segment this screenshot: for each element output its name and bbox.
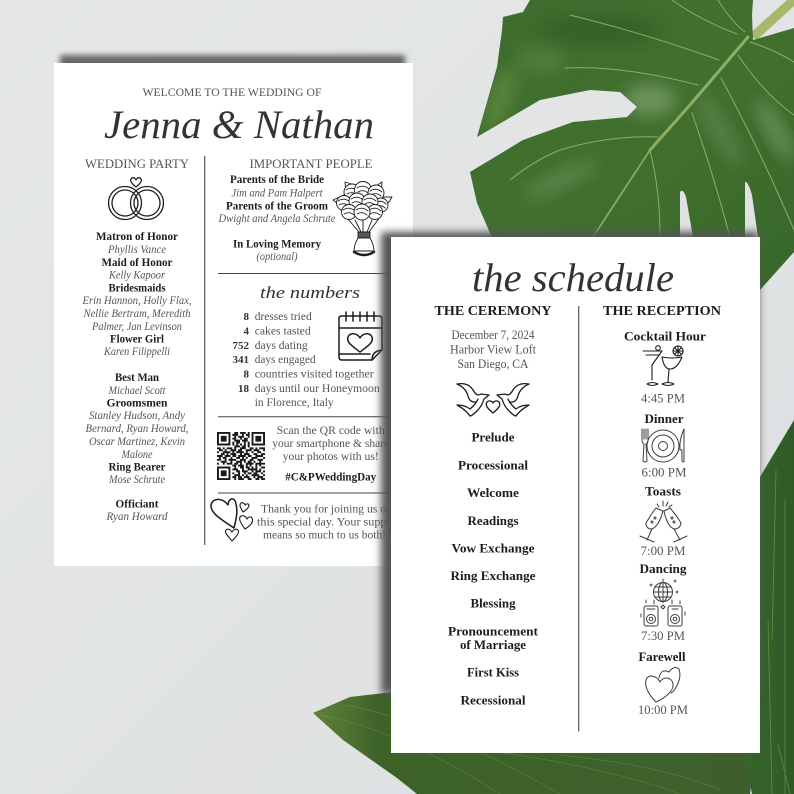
monstera leaf, top right bbox=[470, 0, 794, 290]
text block: date and venue: San Diego, CA bbox=[458, 356, 529, 371]
text block: wedding party names: Kelly Kapoor bbox=[108, 268, 165, 282]
text block: important people names: Jim and Pam Halpert bbox=[232, 186, 323, 200]
list: ceremony order: Pronouncement bbox=[448, 623, 539, 638]
text block: thank you: means so much to us both! bbox=[263, 528, 386, 542]
reception item: cocktail hour: 4:45 PM bbox=[641, 391, 685, 406]
text block: important people names: Parents of the Groom bbox=[226, 198, 328, 212]
text block: wedding party names: Matron of Honor bbox=[96, 229, 179, 243]
text block: number statistics bbox=[232, 309, 380, 409]
reception item: toasts bbox=[640, 484, 687, 558]
icon: wedding rings with heart bbox=[108, 178, 164, 220]
column divider bbox=[578, 306, 580, 732]
divider bbox=[218, 416, 400, 418]
text block: number statistics: cakes tasted bbox=[255, 324, 311, 338]
text block: QR instructions: your smartphone & share bbox=[272, 436, 389, 450]
card shadow: schedule card bbox=[381, 232, 759, 694]
reception item: dinner bbox=[642, 411, 687, 480]
text block: number statistics: countries visited together bbox=[255, 366, 374, 380]
text block: wedding party names: Stanley Hudson, Andy bbox=[89, 408, 186, 422]
list: ceremony order: Vow Exchange bbox=[452, 540, 535, 555]
list: ceremony order: Blessing bbox=[470, 596, 516, 611]
title: couple names: Jenna & Nathan bbox=[104, 102, 374, 147]
text block: number statistics: 4 bbox=[244, 326, 250, 338]
text block: wedding party names: Oscar Martinez, Kevin bbox=[89, 434, 185, 448]
text block: number statistics: dresses tried bbox=[255, 309, 312, 323]
text block: wedding party names: Mose Schrute bbox=[108, 472, 166, 486]
icon: plate and cutlery bbox=[642, 429, 684, 462]
text block: wedding party names: Palmer, Jan Levinson bbox=[91, 319, 182, 333]
text block: thank you: this special day. Your support bbox=[257, 515, 401, 529]
text block: wedding party names: Ryan Howard bbox=[106, 509, 168, 523]
reception item: farewell: Farewell bbox=[638, 649, 686, 664]
text block: thank you bbox=[257, 502, 401, 542]
title: the schedule: the schedule bbox=[472, 255, 674, 300]
icon: two hearts bbox=[646, 668, 680, 702]
heading: the reception: THE RECEPTION bbox=[603, 304, 721, 319]
text block: QR instructions: #C&PWeddingDay bbox=[285, 470, 376, 484]
text block: number statistics: 8 bbox=[244, 368, 250, 380]
text block: important people names bbox=[218, 172, 336, 263]
text block: wedding party names: Bernard, Ryan Howard, bbox=[86, 421, 188, 435]
reception item: dinner: Dinner bbox=[644, 411, 684, 426]
card shadow: program card bbox=[60, 55, 405, 115]
panel: welcome program card bbox=[54, 63, 413, 566]
text block: wedding party names: Malone bbox=[121, 447, 153, 461]
reception item: dinner: 6:00 PM bbox=[642, 465, 687, 480]
reception item: toasts: Toasts bbox=[645, 484, 681, 499]
text block: wedding party names: Nellie Bertram, Meredith bbox=[83, 306, 190, 320]
list: ceremony order: Processional bbox=[458, 458, 528, 473]
text block: QR instructions: Scan the QR code with bbox=[277, 423, 385, 437]
list: ceremony order bbox=[448, 430, 539, 707]
text block: number statistics: 752 bbox=[232, 340, 250, 352]
text block: wedding party names: Officiant bbox=[116, 496, 158, 510]
reception item: dancing: Dancing bbox=[640, 561, 687, 576]
icon: cocktails bbox=[643, 346, 683, 386]
text block: important people names: Parents of the Bride bbox=[230, 172, 325, 186]
heading: wedding party: WEDDING PARTY bbox=[85, 156, 190, 171]
icon: disco ball and speakers bbox=[641, 579, 685, 626]
text block: date and venue bbox=[450, 327, 536, 371]
icon: champagne toast bbox=[640, 501, 687, 542]
divider bbox=[218, 272, 400, 274]
icon: hearts bbox=[211, 499, 253, 541]
text block: number statistics: 8 bbox=[244, 311, 250, 323]
text block: QR instructions: your photos with us! bbox=[283, 449, 379, 463]
heading: welcome line: WELCOME TO THE WEDDING OF bbox=[142, 85, 322, 99]
reception item: farewell: 10:00 PM bbox=[638, 702, 688, 717]
text block: wedding party names: Michael Scott bbox=[108, 383, 166, 397]
text block: date and venue: Harbor View Loft bbox=[450, 342, 536, 357]
text block: wedding party names: Bridesmaids bbox=[108, 280, 166, 294]
text block: wedding party names bbox=[82, 229, 192, 523]
divider bbox=[218, 492, 400, 494]
text block: number statistics: 18 bbox=[238, 383, 250, 395]
text block: number statistics: in Florence, Italy bbox=[255, 395, 334, 409]
column divider bbox=[204, 156, 206, 545]
leaf, right edge bbox=[742, 420, 794, 794]
heading: the ceremony: THE CEREMONY bbox=[434, 304, 552, 319]
heading: the numbers: the numbers bbox=[260, 283, 360, 302]
reception item: dancing bbox=[640, 561, 687, 643]
reception item: cocktail hour bbox=[624, 329, 706, 406]
text block: date and venue: December 7, 2024 bbox=[452, 327, 535, 342]
text block: thank you: Thank you for joining us on bbox=[261, 502, 392, 516]
list: ceremony order: First Kiss bbox=[467, 665, 519, 680]
heading: important people: IMPORTANT PEOPLE bbox=[250, 156, 373, 171]
text block: important people names: (optional) bbox=[256, 249, 298, 263]
text block: wedding party names: Karen Filippelli bbox=[103, 344, 170, 358]
reception item: dancing: 7:30 PM bbox=[641, 628, 685, 643]
list: ceremony order: of Marriage bbox=[460, 637, 526, 652]
text block: number statistics: 341 bbox=[232, 354, 249, 366]
text block: wedding party names: Flower Girl bbox=[110, 332, 165, 346]
list: ceremony order: Prelude bbox=[472, 430, 515, 445]
leaf, bottom bbox=[313, 692, 760, 794]
text block: important people names: In Loving Memory bbox=[233, 236, 321, 250]
list: ceremony order: Ring Exchange bbox=[450, 568, 536, 583]
text block: QR instructions bbox=[272, 423, 389, 484]
QR code bbox=[217, 433, 265, 479]
text block: wedding party names: Best Man bbox=[115, 370, 159, 384]
reception item: toasts: 7:00 PM bbox=[640, 543, 686, 558]
text block: number statistics: days engaged bbox=[255, 352, 316, 366]
text block: number statistics: days dating bbox=[255, 338, 308, 352]
text block: wedding party names: Phyllis Vance bbox=[107, 242, 167, 256]
icon: calendar with heart bbox=[339, 312, 382, 360]
text block: number statistics: days until our Honeymoon bbox=[255, 381, 380, 395]
list: ceremony order: Readings bbox=[468, 513, 518, 528]
list: ceremony order: Welcome bbox=[467, 485, 519, 500]
text block: wedding party names: Groomsmen bbox=[106, 396, 168, 410]
reception item: farewell bbox=[638, 649, 688, 717]
list: ceremony order: Recessional bbox=[460, 692, 526, 707]
icon: flower bouquet bbox=[333, 182, 392, 255]
icon: doves with heart bbox=[457, 384, 529, 416]
text block: wedding party names: Maid of Honor bbox=[102, 255, 173, 269]
text block: wedding party names: Erin Hannon, Holly Flax, bbox=[82, 293, 192, 307]
text block: wedding party names: Ring Bearer bbox=[108, 460, 166, 474]
panel: schedule card bbox=[391, 237, 760, 753]
text block: important people names: Dwight and Angela Schrute bbox=[218, 211, 336, 225]
reception item: cocktail hour: Cocktail Hour bbox=[624, 329, 706, 344]
